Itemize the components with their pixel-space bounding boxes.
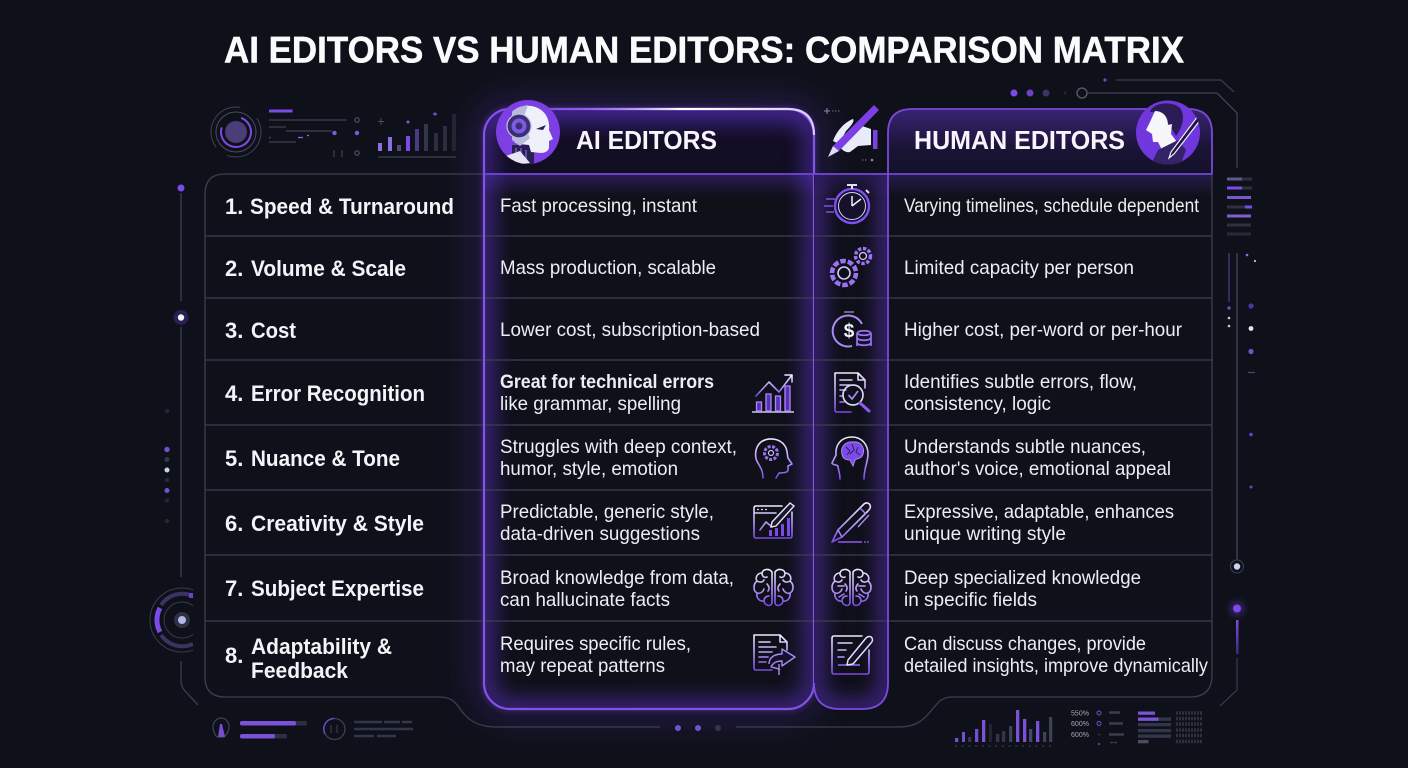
label: creativity: 6. <box>225 511 243 536</box>
header divider <box>484 173 1212 175</box>
icon: rising chart <box>752 375 794 412</box>
row 8 <box>225 633 1208 683</box>
AI text: creativity <box>500 501 714 545</box>
icon: writing hand <box>828 105 879 157</box>
icon: dollar and coins <box>833 312 871 347</box>
human text: expertise: in specific fields <box>904 589 1037 611</box>
icon: AI robot avatar <box>496 100 560 166</box>
heading: AI editors: AI EDITORS <box>576 125 717 155</box>
outer glow behind AI panel <box>484 109 814 709</box>
human text: nuance: Understands subtle nuances, <box>904 436 1146 458</box>
human text: nuance <box>904 436 1171 480</box>
decoration: bottom-right dot grid <box>1176 713 1202 742</box>
icon: pen <box>832 503 870 542</box>
icon: head with gear <box>756 439 792 478</box>
label: adaptability: 8. <box>225 643 243 668</box>
human text: speed: Varying timelines, schedule dependent <box>904 195 1200 217</box>
label: error recognition: 4. <box>225 381 243 406</box>
AI text: errors: like grammar, spelling <box>500 393 681 415</box>
icon: brain outline <box>754 569 793 605</box>
label: adaptability: Feedback <box>251 658 349 683</box>
decoration: top-left bar chart <box>378 112 456 157</box>
human text: expertise: Deep specialized knowledge <box>904 567 1141 589</box>
row 7 <box>225 567 1141 611</box>
label: cost: Cost <box>251 318 297 343</box>
decoration: right rail <box>1220 253 1256 706</box>
label: expertise: Subject Expertise <box>251 576 424 601</box>
label: adaptability <box>225 634 392 683</box>
decoration: bottom-right stacked bars <box>1138 712 1171 743</box>
row 1 <box>225 185 1200 223</box>
AI text: expertise: can hallucinate facts <box>500 589 670 611</box>
icon: detailed brain <box>832 569 871 605</box>
panel: AI editors column <box>484 109 814 709</box>
table frame <box>205 174 1212 727</box>
icon: stopwatch <box>824 185 869 223</box>
label: cost <box>225 318 297 343</box>
AI text: cost: Lower cost, subscription-based <box>500 319 760 341</box>
title: AI EDITORS VS HUMAN EDITORS: COMPARISON MATRIX <box>224 30 1184 70</box>
AI text: nuance <box>500 436 737 480</box>
decoration: bottom-right percentages: 550% <box>1071 710 1089 718</box>
human text: creativity: unique writing style <box>904 523 1066 545</box>
label: nuance: Nuance & Tone <box>251 446 400 471</box>
heading: human editors: HUMAN EDITORS <box>914 125 1125 155</box>
human text: errors <box>904 371 1137 415</box>
icon: document search <box>835 373 869 412</box>
human text: nuance: author's voice, emotional appeal <box>904 458 1171 480</box>
AI text: adaptability <box>500 633 691 677</box>
human text: errors: Identifies subtle errors, flow, <box>904 371 1137 393</box>
human text: creativity: Expressive, adaptable, enhances <box>904 501 1174 523</box>
label: adaptability: Adaptability & <box>251 634 392 659</box>
human text: creativity <box>904 501 1174 545</box>
label: volume: Volume & Scale <box>251 256 406 281</box>
label: speed: Speed & Turnaround <box>250 194 454 219</box>
human text: cost: Higher cost, per-word or per-hour <box>904 319 1182 341</box>
decoration: bottom-left status <box>213 718 413 740</box>
decoration: left concentric dial <box>150 588 193 652</box>
decoration: bottom-right bar chart <box>955 710 1052 746</box>
label: error recognition: Error Recognition <box>251 381 425 406</box>
AI text: expertise: Broad knowledge from data, <box>500 567 734 589</box>
AI text: nuance: humor, style, emotion <box>500 458 678 480</box>
panel: human editors header <box>888 109 1212 197</box>
decoration: bottom-right percentages: 600% <box>1071 732 1089 739</box>
label: nuance: 5. <box>225 446 243 471</box>
icon: dollar and coins: $ <box>844 321 855 342</box>
icon: head with brain <box>832 437 868 479</box>
human text: adaptability: detailed insights, improve dynamically <box>904 655 1208 677</box>
decoration: top-right connector <box>1010 78 1237 168</box>
icon: human editor avatar <box>1136 100 1201 166</box>
AI text: nuance: Struggles with deep context, <box>500 436 737 458</box>
icon: chart window with pen <box>754 503 794 538</box>
AI text: expertise <box>500 567 734 611</box>
icon: gears <box>832 248 870 285</box>
icon: note with pencil <box>832 636 872 674</box>
label: cost: 3. <box>225 318 243 343</box>
decoration: top-left data lines <box>269 110 359 157</box>
AI text: speed: Fast processing, instant <box>500 195 698 217</box>
row 2 <box>225 248 1134 285</box>
row 3 <box>225 312 1182 347</box>
decoration: bottom-right percentages: 600% <box>1071 721 1089 728</box>
row 4 <box>225 371 1137 415</box>
human text: volume: Limited capacity per person <box>904 257 1134 279</box>
AI text: errors <box>500 371 714 415</box>
AI text: errors: Great for technical errors <box>500 371 714 393</box>
human text: adaptability: Can discuss changes, provide <box>904 633 1146 655</box>
AI text: adaptability: may repeat patterns <box>500 655 665 677</box>
human text: expertise <box>904 567 1141 611</box>
label: creativity: Creativity & Style <box>251 511 424 536</box>
human text: adaptability <box>904 633 1208 677</box>
label: speed: 1. <box>225 194 243 219</box>
AI text: volume: Mass production, scalable <box>500 257 716 279</box>
decoration: bottom centre dots <box>675 725 721 731</box>
decoration: sparkles near pen <box>824 108 873 161</box>
decoration: left rail <box>164 184 198 705</box>
decoration: top-left dial <box>211 107 261 157</box>
label: expertise: 7. <box>225 576 243 601</box>
AI text: creativity: data-driven suggestions <box>500 523 700 545</box>
row 5 <box>225 436 1171 480</box>
panel: middle icon column <box>814 174 888 709</box>
label: volume: 2. <box>225 256 243 281</box>
row 6 <box>225 501 1174 545</box>
human text: errors: consistency, logic <box>904 393 1051 415</box>
decoration: right level bars <box>1227 178 1252 236</box>
AI text: adaptability: Requires specific rules, <box>500 633 691 655</box>
decoration: bottom-right percentages <box>1071 710 1124 745</box>
AI text: creativity: Predictable, generic style, <box>500 501 714 523</box>
icon: document with arrow <box>754 635 795 675</box>
